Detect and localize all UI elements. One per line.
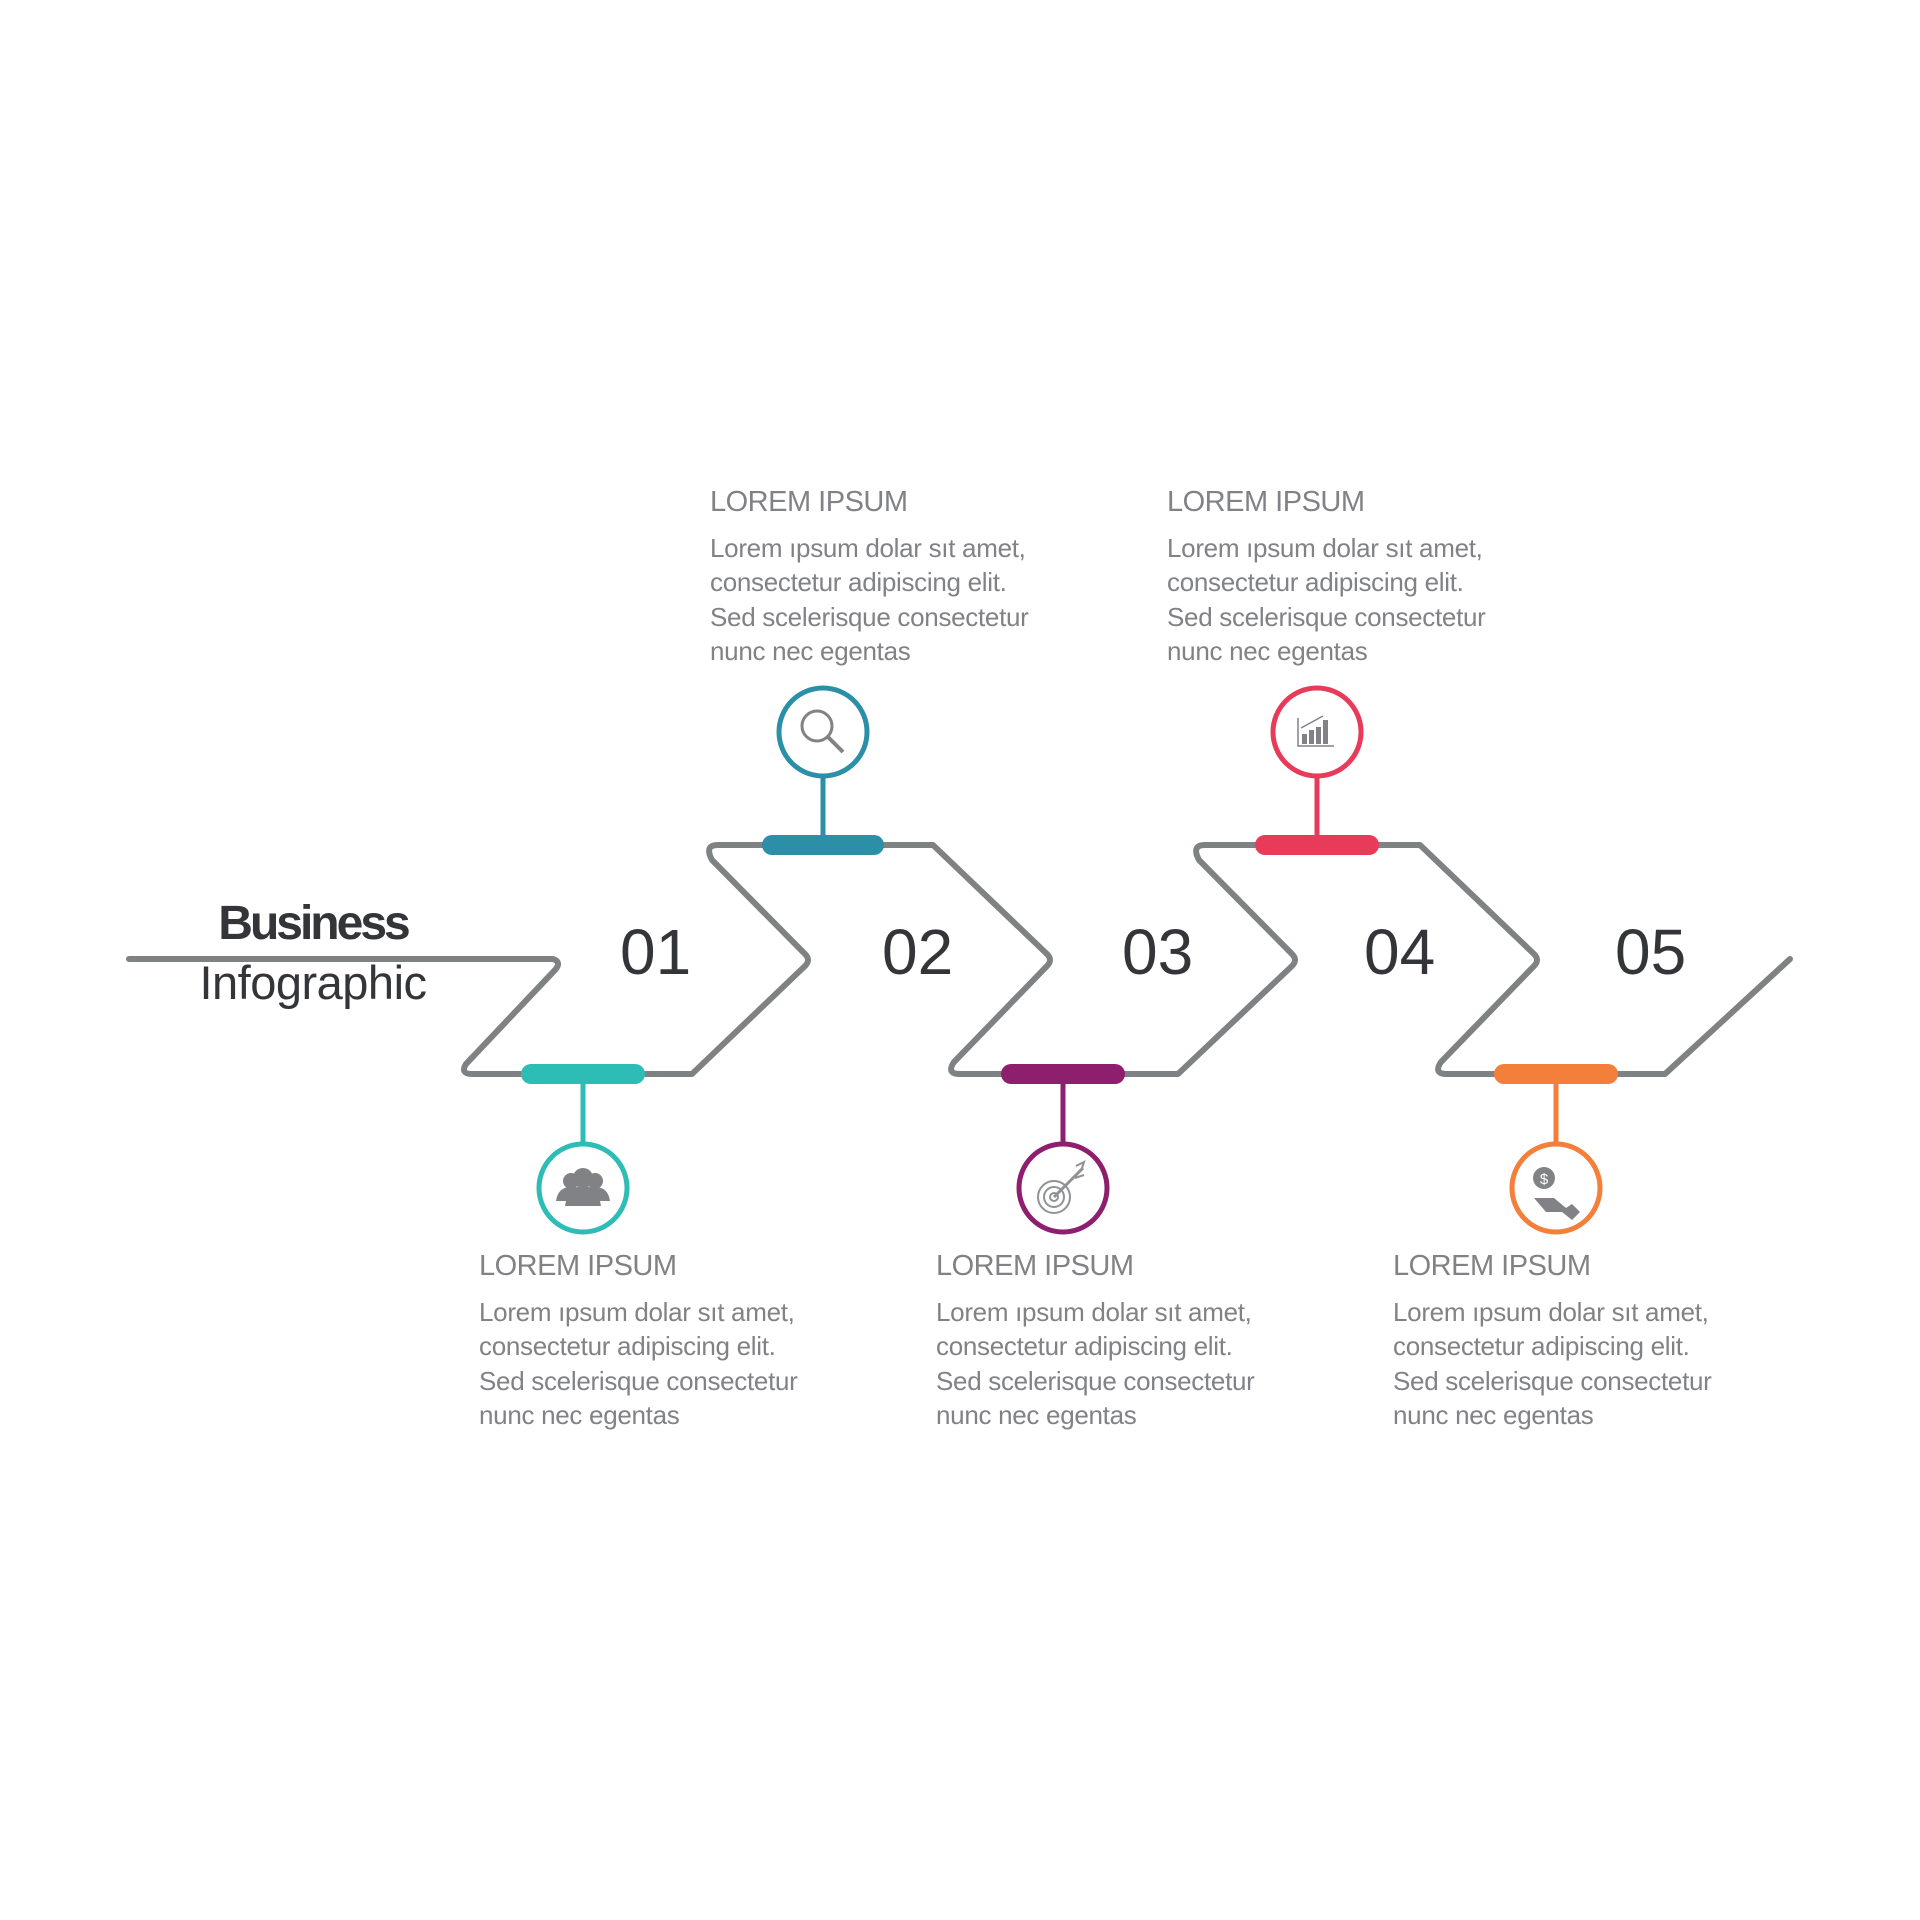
text: step 5: Lorem ıpsum dolar sıt amet, (1393, 1297, 1709, 1327)
icon: target (1038, 1162, 1084, 1213)
text: step 2: consectetur adipiscing elit. (710, 567, 1007, 597)
icon: people (556, 1168, 610, 1206)
text: step 1: LOREM IPSUM (479, 1250, 677, 1282)
text: step 2: Sed scelerisque consectetur (710, 602, 1029, 632)
text: step 3: nunc nec egentas (936, 1400, 1136, 1430)
step numbers: 01 (620, 916, 691, 988)
text: step 5 (1393, 1250, 1712, 1430)
text: step 1: Sed scelerisque consectetur (479, 1366, 798, 1396)
text: step 4: LOREM IPSUM (1167, 486, 1365, 518)
step 5 marker (1494, 1064, 1618, 1232)
title (199, 897, 427, 1009)
text: step 4 (1167, 486, 1486, 666)
step 4 marker (1255, 688, 1379, 855)
step 2 marker (762, 688, 884, 855)
text: step 1: nunc nec egentas (479, 1400, 679, 1430)
text: step 2: LOREM IPSUM (710, 486, 908, 518)
step numbers: 04 (1364, 916, 1435, 988)
text: step 4: Sed scelerisque consectetur (1167, 602, 1486, 632)
step numbers: 05 (1615, 916, 1686, 988)
title: Infographic (199, 956, 427, 1009)
text: step 5: nunc nec egentas (1393, 1400, 1593, 1430)
text: step 5: consectetur adipiscing elit. (1393, 1331, 1690, 1361)
text: step 3 (936, 1250, 1255, 1430)
icon: bar chart (1298, 716, 1334, 746)
title: Business (218, 897, 408, 950)
text: step 4: Lorem ıpsum dolar sıt amet, (1167, 533, 1483, 563)
text: step 1: consectetur adipiscing elit. (479, 1331, 776, 1361)
text: step 3: Lorem ıpsum dolar sıt amet, (936, 1297, 1252, 1327)
icon: magnifier (802, 711, 843, 752)
text: step 2 (710, 486, 1029, 666)
icon: hand with coin: $ (1540, 1171, 1549, 1188)
step numbers: 02 (882, 916, 953, 988)
icon: hand with coin (1533, 1167, 1580, 1220)
text: step 3: LOREM IPSUM (936, 1250, 1134, 1282)
text: step 2: Lorem ıpsum dolar sıt amet, (710, 533, 1026, 563)
text: step 4: nunc nec egentas (1167, 636, 1367, 666)
text: step 2: nunc nec egentas (710, 636, 910, 666)
text: step 3: Sed scelerisque consectetur (936, 1366, 1255, 1396)
text: step 1 (479, 1250, 798, 1430)
step numbers: 03 (1122, 916, 1193, 988)
text: step 4: consectetur adipiscing elit. (1167, 567, 1464, 597)
text: step 5: LOREM IPSUM (1393, 1250, 1591, 1282)
step 3 marker (1001, 1064, 1125, 1232)
text: step 5: Sed scelerisque consectetur (1393, 1366, 1712, 1396)
text: step 1: Lorem ıpsum dolar sıt amet, (479, 1297, 795, 1327)
text: step 3: consectetur adipiscing elit. (936, 1331, 1233, 1361)
step 1 marker (521, 1064, 645, 1232)
step numbers (620, 916, 1686, 988)
zigzag path (129, 845, 1790, 1074)
